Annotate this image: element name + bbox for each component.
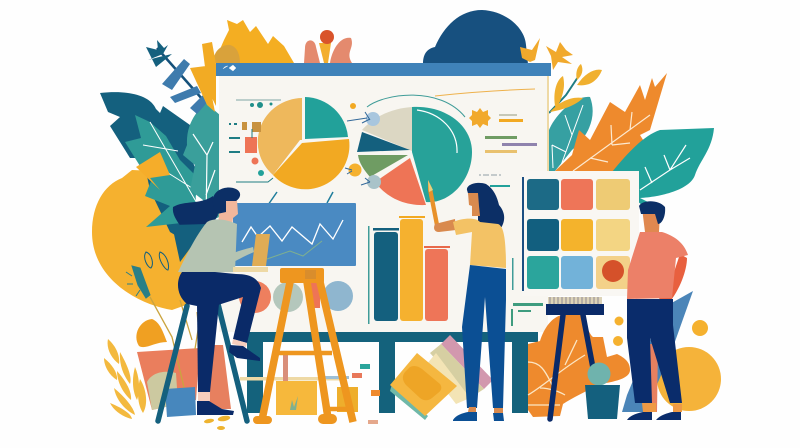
teal dots bbox=[250, 102, 272, 108]
white highlight arc bbox=[417, 110, 457, 153]
teal small leaf bbox=[549, 97, 593, 171]
tall teal leaf bbox=[183, 102, 221, 224]
small leaf veins bbox=[552, 105, 583, 168]
arm bbox=[222, 247, 254, 266]
spiky teal pod bbox=[126, 266, 150, 298]
crossbar bbox=[245, 332, 538, 342]
seed pods bbox=[145, 252, 169, 270]
sprout on box bbox=[290, 396, 298, 410]
orange leaf veins bbox=[573, 112, 650, 171]
ladder bbox=[253, 268, 353, 424]
ladder rungs bbox=[278, 353, 347, 409]
orange slice bbox=[273, 139, 349, 189]
large orange leaf bbox=[555, 73, 667, 171]
coral swatch bbox=[561, 179, 593, 210]
navy blob above board bbox=[423, 10, 528, 64]
cream sheet bbox=[426, 353, 470, 404]
light teal leaf bbox=[125, 115, 196, 227]
navy rule bbox=[522, 177, 524, 291]
left chart annotations bbox=[229, 100, 356, 205]
hair bbox=[467, 183, 504, 231]
top rule bbox=[236, 99, 281, 101]
pink sheet bbox=[441, 335, 493, 389]
teal slice bbox=[412, 107, 472, 202]
trousers seat and raised leg bbox=[178, 272, 261, 343]
stool top bbox=[546, 304, 604, 315]
coral petals bbox=[304, 38, 352, 63]
hair bbox=[639, 201, 665, 224]
foliage behind board, left bbox=[92, 20, 294, 310]
pale orange slice bbox=[258, 98, 302, 175]
legend squares bbox=[242, 122, 261, 132]
title bar icon bbox=[223, 65, 236, 71]
orange notebook bbox=[390, 353, 457, 416]
sun icon bbox=[469, 108, 491, 128]
marker leaders bbox=[345, 112, 370, 185]
stacked papers on floor bbox=[390, 335, 493, 420]
coral bar cap bbox=[424, 246, 450, 248]
ankle sock bbox=[198, 392, 210, 401]
ladder right foot bbox=[318, 414, 337, 424]
coral circle bbox=[239, 281, 271, 313]
raised shoe bbox=[229, 345, 260, 361]
pie chart left bbox=[258, 97, 349, 189]
standing leg bbox=[197, 304, 219, 392]
green line series bbox=[267, 241, 322, 259]
plant and pot left bbox=[104, 252, 231, 430]
pencil bbox=[428, 180, 439, 226]
teal shade behind bbox=[172, 224, 208, 262]
dot three bbox=[692, 320, 708, 336]
white veins bbox=[528, 340, 585, 405]
stool with plant bbox=[546, 297, 620, 419]
clipboard base bbox=[233, 267, 268, 272]
raised sock bbox=[232, 339, 247, 347]
teal chip bbox=[360, 364, 370, 369]
board right edge bbox=[547, 76, 549, 171]
sweater bbox=[178, 219, 237, 273]
tall leaf veins bbox=[193, 134, 215, 222]
orange brush top bbox=[214, 20, 294, 63]
left shoe bbox=[627, 412, 652, 420]
ladder top detail bbox=[305, 270, 316, 279]
book stack bbox=[548, 297, 602, 304]
navy slice bbox=[357, 132, 410, 152]
blue box bbox=[165, 387, 196, 417]
forearm bbox=[659, 254, 687, 304]
neck and face bbox=[218, 200, 238, 226]
sage circle bbox=[273, 282, 303, 312]
pencil tip bbox=[428, 180, 433, 192]
yellow brush ball bbox=[92, 170, 215, 310]
trousers bbox=[627, 299, 682, 403]
plant stems bbox=[150, 297, 200, 400]
hair bbox=[213, 187, 240, 214]
blue line chart panel bbox=[233, 203, 356, 266]
teal dot bbox=[258, 170, 264, 176]
light leaf veins bbox=[143, 122, 198, 205]
sand swatch bbox=[596, 179, 630, 210]
sky swatch bbox=[561, 256, 593, 289]
table frame under board bbox=[245, 332, 538, 413]
orange bar bbox=[400, 219, 423, 321]
connector lines bbox=[236, 129, 273, 182]
coral dot bbox=[252, 158, 258, 164]
sun icon and legend lines bbox=[469, 108, 537, 187]
teal right leaf bbox=[612, 128, 714, 212]
green line bbox=[485, 136, 517, 139]
deep teal swatch bbox=[527, 179, 559, 210]
seated woman bbox=[158, 187, 270, 421]
yellow box bbox=[276, 381, 317, 415]
orange blade leaves bbox=[190, 42, 216, 112]
teal leaf veins bbox=[640, 145, 690, 190]
fern blue fronds bbox=[162, 59, 211, 114]
standing man bbox=[627, 201, 688, 420]
small box bbox=[337, 387, 358, 412]
foliage behind board, right bbox=[520, 38, 714, 212]
standing shoe bbox=[197, 401, 234, 415]
dot two bbox=[613, 336, 623, 346]
outer arc bbox=[367, 95, 465, 117]
flower above board bbox=[304, 30, 352, 63]
succulent bbox=[588, 362, 610, 386]
blue leaf bbox=[622, 291, 693, 412]
coral bar bbox=[425, 249, 448, 321]
salmon chip bbox=[368, 420, 378, 424]
coral pot bbox=[137, 348, 200, 410]
pie chart right bbox=[357, 89, 535, 205]
grey line bbox=[499, 114, 517, 116]
teal bar cap bbox=[373, 228, 399, 230]
leg 3 bbox=[512, 342, 528, 413]
swatch row 3 bbox=[527, 256, 630, 289]
fern navy tips bbox=[146, 40, 172, 67]
teal sheet bbox=[390, 384, 428, 420]
green branch bbox=[549, 77, 578, 113]
note vertical bbox=[511, 309, 513, 326]
big orange circle bbox=[657, 347, 721, 411]
floor dots bbox=[204, 416, 230, 430]
ladder left foot bbox=[253, 416, 272, 424]
arm bbox=[434, 219, 456, 232]
hair tail bbox=[173, 196, 218, 232]
orange line bbox=[499, 119, 523, 122]
beige pot motif bbox=[147, 372, 178, 410]
ochre dome bbox=[214, 45, 240, 64]
green slice bbox=[358, 155, 408, 177]
shoes bbox=[453, 412, 504, 421]
teal label line bbox=[490, 185, 510, 187]
small label ticks bbox=[479, 174, 501, 176]
ankles bbox=[642, 403, 682, 412]
red dot bbox=[602, 260, 624, 282]
orange blob bbox=[528, 314, 630, 417]
notebook panel bbox=[403, 366, 441, 400]
teal slice bbox=[305, 97, 348, 139]
head bbox=[642, 208, 660, 232]
orange bush under stool bbox=[528, 314, 630, 417]
yellow sprigs bbox=[520, 38, 573, 70]
pot bbox=[585, 385, 620, 419]
coral bar bbox=[308, 281, 320, 308]
swatch row 1 bbox=[527, 179, 630, 210]
ladder top bbox=[280, 268, 324, 283]
clipboard bbox=[252, 234, 270, 266]
beige sheet bbox=[430, 344, 484, 398]
decorative circles on board bbox=[239, 281, 353, 313]
white line series bbox=[242, 220, 343, 244]
row dashes bbox=[229, 124, 240, 152]
bar chart bbox=[368, 216, 450, 324]
chart background bbox=[233, 203, 356, 266]
shirt bbox=[627, 232, 688, 299]
yellow reeds bbox=[104, 339, 146, 419]
dot one bbox=[614, 316, 624, 326]
ankles bbox=[468, 407, 503, 413]
orange bar cap bbox=[399, 216, 425, 218]
sand swatch with dot bbox=[596, 256, 630, 289]
navy teal swatch bbox=[527, 219, 559, 251]
swatch card bbox=[522, 171, 639, 296]
coral chip bbox=[352, 373, 362, 378]
branch leaves bbox=[550, 64, 602, 112]
board panel bbox=[219, 76, 548, 332]
board title bar bbox=[216, 63, 551, 76]
tan line bbox=[485, 150, 517, 153]
fern stem bbox=[157, 48, 203, 100]
leg 1 bbox=[247, 342, 263, 413]
orange marker bbox=[348, 164, 362, 176]
card bbox=[522, 171, 639, 296]
right shoe bbox=[656, 412, 681, 420]
ladder rails bbox=[262, 282, 353, 422]
fern stem and fronds bbox=[146, 40, 211, 114]
board lower right notes bbox=[511, 258, 543, 326]
book stack stripes bbox=[550, 297, 598, 304]
blue plank bbox=[323, 376, 349, 379]
yellow stem bbox=[319, 43, 331, 63]
coral pole bbox=[283, 355, 288, 381]
jeans bbox=[462, 265, 506, 408]
stool legs bbox=[158, 304, 247, 421]
coral drape bbox=[208, 345, 231, 409]
beige slice bbox=[362, 107, 412, 151]
orange flame leaf bbox=[136, 152, 170, 190]
light sand swatch bbox=[596, 219, 630, 251]
legend red square bbox=[245, 137, 257, 153]
face bbox=[468, 193, 480, 216]
blue circle bbox=[323, 281, 353, 311]
red bud bbox=[320, 30, 334, 44]
purple line bbox=[502, 143, 537, 146]
orange trend line bbox=[435, 89, 535, 96]
pie callout markers bbox=[345, 112, 381, 189]
small orange leaf bbox=[136, 319, 167, 347]
dark teal leaf bbox=[100, 92, 222, 250]
orange dot bbox=[350, 103, 356, 109]
orange chip bbox=[371, 390, 380, 396]
presentation board bbox=[216, 63, 551, 332]
small orange dots right bbox=[613, 291, 721, 412]
teal swatch bbox=[527, 256, 559, 289]
pins bbox=[268, 192, 333, 205]
axis bbox=[368, 226, 370, 324]
standing woman bbox=[428, 180, 506, 421]
coral slice bbox=[375, 158, 426, 205]
coral strip between legs bbox=[645, 344, 658, 412]
teal bar bbox=[374, 232, 398, 321]
leg 2 bbox=[379, 342, 395, 413]
note line bbox=[513, 303, 543, 306]
thin side rule bbox=[512, 258, 514, 290]
floor items behind ladder bbox=[240, 355, 380, 424]
shirt bbox=[453, 219, 506, 268]
blue marker bbox=[366, 112, 380, 126]
note short line bbox=[518, 310, 531, 312]
swatch row 2 bbox=[527, 219, 630, 251]
stool legs bbox=[550, 315, 593, 419]
yellow swatch bbox=[561, 219, 593, 251]
tan plank bbox=[240, 377, 340, 380]
grey marker bbox=[367, 175, 381, 189]
